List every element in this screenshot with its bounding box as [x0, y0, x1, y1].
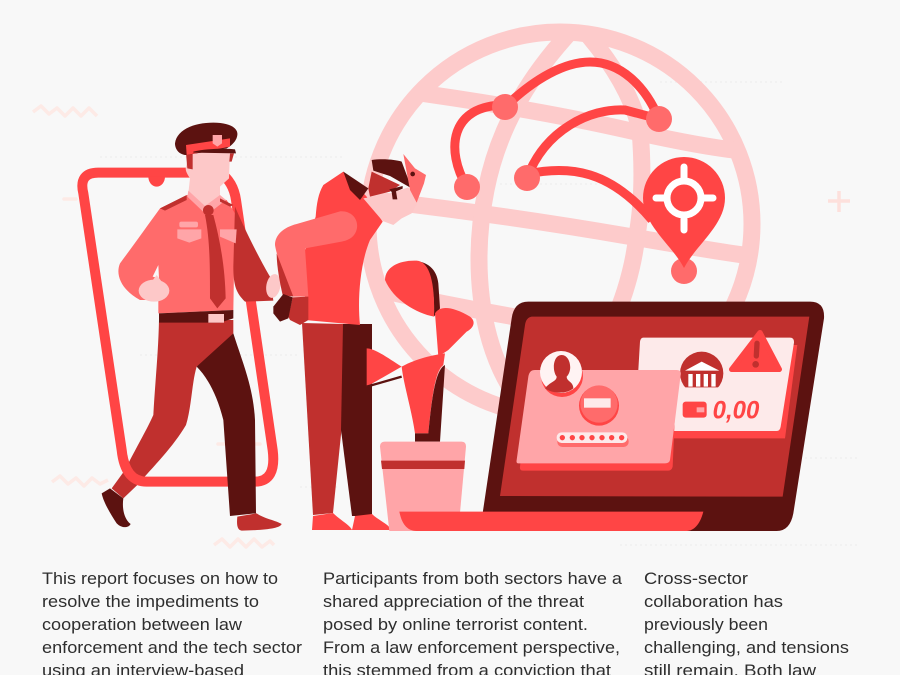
tie [203, 205, 226, 308]
text column 2 [323, 569, 623, 675]
text column 3: Cross-sector [644, 569, 748, 588]
head with cap [363, 154, 426, 225]
arrested suspect [273, 154, 426, 530]
laptop base [399, 512, 703, 531]
text column 1: resolve the impediments to [42, 592, 259, 611]
text column 1: cooperation between law [42, 615, 243, 634]
icon: blocked sign [579, 385, 619, 426]
balance amount: 0,00 [713, 396, 759, 424]
icon: wallet [683, 402, 707, 418]
uniform shirt [118, 195, 235, 313]
pot [380, 442, 466, 531]
text column 2: Participants from both sectors have a [323, 569, 623, 588]
login window [517, 351, 681, 471]
phone frame [82, 173, 273, 482]
globe [358, 30, 770, 416]
back leg [197, 333, 256, 516]
shoes [102, 488, 282, 531]
text column 2: posed by online terrorist content. [323, 615, 588, 634]
trousers [302, 323, 372, 516]
shoes [312, 513, 391, 530]
screen [500, 317, 809, 497]
icon: warning triangle [732, 333, 779, 369]
laptop frame [480, 302, 824, 531]
text column 3: collaboration has [644, 592, 783, 611]
icon: bank [680, 352, 723, 397]
police officer with phone frame [82, 123, 282, 531]
network arcs and nodes [454, 62, 697, 284]
icon: user avatar [540, 351, 583, 397]
right arm [233, 207, 273, 302]
face and neck [186, 152, 234, 215]
arm and cuffed hands [273, 211, 357, 325]
laptop [399, 302, 824, 531]
police cap [175, 123, 237, 155]
icon: location pin with target [643, 157, 725, 268]
pockets and badge [177, 222, 237, 243]
upper body and head [273, 154, 426, 325]
password field [557, 432, 629, 447]
text column 3 [644, 569, 849, 675]
text column 2: shared appreciation of the threat [323, 592, 584, 611]
hoodie [305, 172, 383, 325]
text column 3: previously been [644, 615, 768, 634]
leaves [367, 261, 474, 442]
epaulettes [160, 195, 233, 211]
hands [139, 273, 282, 302]
potted plant [367, 261, 474, 531]
belt [159, 310, 233, 323]
text column 1: enforcement and the tech sector [42, 638, 302, 657]
text column 2: From a law enforcement perspective, [323, 638, 620, 657]
bank balance window [638, 333, 797, 438]
text column 1 [42, 569, 302, 675]
text column 1: This report focuses on how to [42, 569, 278, 588]
text column 3: challenging, and tensions [644, 638, 849, 657]
